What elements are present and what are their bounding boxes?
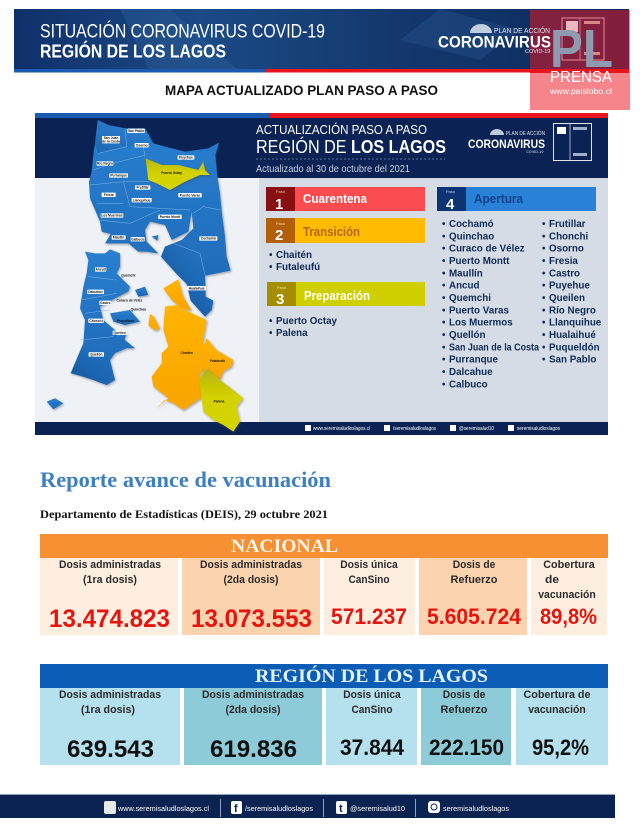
- nacional: cobertura: [531, 558, 607, 635]
- panel logo coronavirus: CORONAVIRUS: [468, 137, 545, 151]
- region: cansino: [326, 688, 417, 765]
- nacional: 1ra dosis: Dosis administradas: [59, 559, 161, 571]
- step 2: transicion: [266, 218, 425, 244]
- panel: region de los lagos: [40, 664, 608, 765]
- panel: nacional: NACIONAL: [231, 536, 338, 557]
- step 4 list, column 2: •: [542, 342, 546, 353]
- top banner: [14, 9, 629, 72]
- nacional: refuerzo: Refuerzo: [450, 574, 498, 586]
- map: commune labels: Frutillar: [136, 186, 150, 190]
- step 4 list, column 2: [542, 219, 602, 366]
- step 3: preparacion: [267, 282, 425, 308]
- region: refuerzo: 222.150: [429, 735, 504, 760]
- panel: nacional: [40, 534, 608, 635]
- step 4 list, column 1: Cochamó: [449, 219, 494, 230]
- nacional: cobertura: de: [545, 574, 559, 586]
- map: commune labels: Quellón: [90, 353, 103, 357]
- map: commune labels: Hualaihué: [189, 286, 205, 290]
- step 4 list, column 2: •: [542, 305, 546, 316]
- step 4 list, column 2: San Pablo: [549, 355, 596, 366]
- region: 1ra dosis: (1ra dosis): [81, 704, 135, 716]
- nacional: 1ra dosis: 13.474.823: [49, 605, 170, 633]
- region: cobertura: 95,2%: [532, 735, 589, 760]
- step 4 list, column 1: San Juan de la Costa: [449, 342, 540, 353]
- heading: mapa actualizado: MAPA ACTUALIZADO PLAN PASO A PASO: [165, 82, 438, 98]
- step 1: cuarentena: [266, 187, 425, 213]
- region: refuerzo: [421, 688, 511, 765]
- nacional: cansino: Dosis única: [340, 559, 399, 571]
- step 4 list, column 2: Frutillar: [549, 219, 586, 230]
- step 4 list, column 2: Chonchi: [549, 231, 588, 242]
- banner title: REGIÓN DE LOS LAGOS: [40, 40, 226, 62]
- step 1: cuarentena: Paso: [276, 189, 286, 194]
- map: commune borders: [80, 128, 220, 340]
- map: commune labels: Río Negro: [97, 162, 113, 166]
- panel footer links: /seremisaludloslagos: [393, 426, 436, 432]
- instagram link: seremisaludloslagos: [443, 806, 510, 813]
- step 3 list: [269, 316, 338, 339]
- banner logo: COVID-19: [525, 49, 550, 55]
- step 4 list, column 2: •: [542, 293, 546, 304]
- step 4 list, column 2: •: [542, 219, 546, 230]
- region: refuerzo: Refuerzo: [440, 704, 488, 716]
- step 4 list, column 2: Osorno: [549, 244, 584, 255]
- nacional: cobertura: Cobertura: [543, 559, 596, 571]
- map: commune labels: Maullín: [113, 236, 124, 240]
- watermark: PL Prensa: PRENSA: [550, 69, 612, 86]
- map: commune labels: Calbuco: [131, 237, 144, 241]
- nacional: 1ra dosis: [40, 558, 178, 635]
- map: commune labels: Dalcahue: [88, 290, 103, 294]
- panel title: [256, 122, 446, 175]
- step 2 list: Chaitén: [276, 250, 312, 261]
- map: commune labels: San Pablo: [128, 129, 144, 133]
- step 4 list, column 2: Llanquihue: [549, 318, 602, 329]
- map: commune labels: Quinchao: [131, 307, 146, 311]
- step 2 list: [269, 250, 320, 273]
- panel footer links: @seremisalud10: [459, 426, 494, 432]
- step 4 list, column 1: •: [442, 244, 446, 255]
- icon: instagram: [428, 801, 440, 813]
- map: commune labels: Los Muermos: [101, 214, 123, 218]
- banner title: SITUACIÓN CORONAVIRUS COVID-19: [40, 20, 325, 42]
- panel title: REGIÓN DE LOS LAGOS: [256, 136, 446, 157]
- map: commune labels: Palena: [214, 399, 224, 403]
- step 4 list, column 1: Quellón: [449, 330, 485, 341]
- step 2: transicion: Paso: [276, 221, 286, 226]
- step 1: cuarentena: 1: [275, 196, 283, 213]
- banner logo: CORONAVIRUS: [438, 32, 551, 52]
- step 4 list, column 1: Puerto Montt: [449, 256, 510, 267]
- region: 1ra dosis: Dosis administradas: [59, 689, 161, 701]
- map: commune labels: Puqueldón: [117, 319, 134, 323]
- region: 1ra dosis: [40, 688, 180, 765]
- map: commune labels: Futaleufú: [210, 359, 225, 363]
- map: commune labels: Puerto Octay: [161, 171, 182, 175]
- map: yellow communes (paso 3): [146, 158, 243, 432]
- step 4 list, column 1: Quinchao: [449, 231, 494, 242]
- heading: reporte avance de vacunacion: Reporte avance de vacunación: [40, 467, 331, 492]
- step 4 list, column 2: •: [542, 318, 546, 329]
- region: cobertura: [516, 688, 608, 765]
- step 2 list: •: [269, 262, 273, 273]
- map: commune labels: Curaco de Vélez: [116, 298, 143, 302]
- footer bar: [0, 794, 615, 818]
- region: cansino: 37.844: [340, 735, 405, 760]
- nacional: cansino: 571.237: [331, 604, 407, 629]
- nacional: 2da dosis: 13.073.553: [191, 605, 312, 633]
- subheading: departamento de estadisticas: Departamento de Estadísticas (DEIS), 29 octubre 2021: [40, 507, 328, 521]
- step 4 list, column 1: •: [442, 379, 446, 390]
- step 4 list, column 1: •: [442, 355, 446, 366]
- step 4 list, column 1: •: [442, 305, 446, 316]
- panel logo coronavirus: [468, 129, 545, 154]
- region: 1ra dosis: 639.543: [67, 736, 154, 763]
- step 4 list, column 2: Puqueldón: [549, 342, 600, 353]
- map: commune labels: Puerto Varas: [180, 193, 200, 197]
- website link: www.seremisaludloslagos.cl: [117, 806, 209, 813]
- map: commune labels: Chaitén: [181, 351, 193, 355]
- region: refuerzo: Dosis de: [443, 689, 485, 701]
- nacional: 2da dosis: [182, 558, 320, 635]
- panel logo coronavirus: COVID-19: [526, 150, 544, 154]
- step 4 list, column 1: Los Muermos: [449, 318, 513, 329]
- watermark: PL Prensa: www.paislobo.cl: [549, 87, 612, 96]
- nacional: cansino: CanSino: [348, 574, 390, 586]
- step 4 list, column 2: •: [542, 330, 546, 341]
- region: 2da dosis: 619.836: [210, 736, 297, 763]
- map: commune labels: Ancud: [95, 268, 106, 272]
- step 4 list, column 1: •: [442, 219, 446, 230]
- panel footer links: seremisaludloslagos: [517, 426, 560, 432]
- map: commune labels: Llanquihue: [133, 198, 151, 202]
- banner title: [40, 20, 325, 62]
- region: cobertura: Cobertura de: [524, 689, 590, 701]
- nacional: cobertura: vacunación: [538, 589, 596, 601]
- map: commune labels: Castro: [100, 301, 111, 305]
- step 4 list, column 1: [442, 219, 540, 390]
- map: commune labels: Puyehue: [179, 156, 193, 160]
- region: cansino: CanSino: [352, 704, 393, 716]
- facebook link: /seremisaludloslagos: [245, 806, 314, 813]
- panel title: ACTUALIZACIÓN PASO A PASO: [256, 122, 427, 137]
- watermark: PL Prensa: PL: [550, 19, 613, 79]
- step 4 list, column 1: Maullín: [449, 268, 483, 279]
- nacional: 2da dosis: Dosis administradas: [200, 559, 302, 571]
- panel logo coronavirus: PLAN DE ACCIÓN: [506, 130, 545, 137]
- region: 2da dosis: [184, 688, 322, 765]
- map: commune labels: Puerto Montt: [160, 215, 181, 219]
- icon: website: [104, 801, 116, 814]
- step 2 list: Futaleufú: [276, 262, 320, 273]
- step 4 list, column 2: Puyehue: [549, 281, 590, 292]
- map: commune labels: [87, 129, 225, 403]
- panel: region de los lagos: REGIÓN DE LOS LAGOS: [255, 665, 488, 687]
- map: commune labels: San Juan: [104, 136, 118, 140]
- icon: twitter: t: [339, 803, 343, 815]
- step 2: transicion: 2: [275, 227, 283, 244]
- step 4: apertura: Apertura: [474, 192, 524, 206]
- panel title: Actualizado al 30 de octubre del 2021: [256, 163, 410, 175]
- icon: facebook: f: [234, 803, 238, 815]
- nacional: 2da dosis: (2da dosis): [224, 574, 279, 586]
- icon: facebook: [231, 801, 242, 815]
- nacional: cansino: [324, 558, 415, 635]
- step 4: apertura: 4: [446, 196, 455, 213]
- step 3 list: Puerto Octay: [276, 316, 338, 327]
- nacional: 1ra dosis: (1ra dosis): [83, 574, 137, 586]
- nacional: refuerzo: Dosis de: [453, 559, 495, 571]
- step 4 list, column 2: •: [542, 244, 546, 255]
- twitter link: @seremisalud10: [350, 806, 405, 813]
- map: commune labels: Queilen: [114, 331, 126, 335]
- step 4 list, column 2: Río Negro: [549, 305, 596, 316]
- step 4 list, column 1: •: [442, 256, 446, 267]
- panel footer links: [305, 425, 560, 432]
- region: 2da dosis: (2da dosis): [226, 704, 281, 716]
- nacional: refuerzo: [419, 558, 527, 635]
- step 4 list, column 1: •: [442, 318, 446, 329]
- step 4 list, column 1: Puerto Varas: [449, 305, 509, 316]
- step 3 list: •: [269, 316, 273, 327]
- map of the region: [47, 120, 243, 432]
- step 4 list, column 1: Quemchi: [449, 293, 491, 304]
- step 4 list, column 1: Calbuco: [449, 379, 488, 390]
- step 4: apertura: Paso: [446, 189, 456, 194]
- step 4 list, column 1: Ancud: [449, 281, 479, 292]
- step 3: preparacion: Paso: [277, 285, 287, 290]
- step 4 list, column 1: •: [442, 367, 446, 378]
- region: 2da dosis: Dosis administradas: [202, 689, 304, 701]
- step 2 list: •: [269, 250, 273, 261]
- step 4 list, column 1: Dalcahue: [449, 367, 493, 378]
- step 4 list, column 2: Fresia: [549, 256, 578, 267]
- step 4 list, column 2: •: [542, 256, 546, 267]
- map: commune labels: Purranque: [110, 174, 127, 178]
- step 4 list, column 1: •: [442, 293, 446, 304]
- map: commune labels: Quemchi: [121, 273, 136, 277]
- icon: twitter: [336, 801, 347, 815]
- step 4 list, column 2: •: [542, 281, 546, 292]
- region: cansino: Dosis única: [343, 689, 402, 701]
- step 4: apertura: [437, 187, 596, 213]
- step 4 list, column 2: •: [542, 268, 546, 279]
- step 4 list, column 1: Purranque: [449, 355, 499, 366]
- banner logo: PLAN DE ACCIÓN: [494, 26, 550, 35]
- map: commune labels: Chonchi: [89, 319, 103, 323]
- nacional: cobertura: 89,8%: [540, 604, 597, 629]
- map: orange communes (paso 2): [148, 279, 233, 410]
- map: blue communes (paso 4): [47, 120, 231, 409]
- step 4 list, column 2: Queilen: [549, 293, 585, 304]
- panel: plan paso a paso: [35, 113, 608, 435]
- map: commune labels: Osorno: [136, 143, 148, 147]
- step 1: cuarentena: Cuarentena: [303, 192, 368, 206]
- map: commune labels: de la Costa: [102, 139, 120, 143]
- nacional: refuerzo: 5.605.724: [427, 604, 522, 629]
- step 3: preparacion: 3: [276, 291, 284, 308]
- step 4 list, column 2: •: [542, 355, 546, 366]
- step 4 list, column 2: Hualaihué: [549, 330, 596, 341]
- map: commune labels: Fresia: [104, 193, 114, 197]
- step 4 list, column 1: Curaco de Vélez: [449, 244, 525, 255]
- map: shaded lower communes: [71, 120, 213, 385]
- banner logo: [438, 24, 551, 55]
- step 4 list, column 1: •: [442, 342, 446, 353]
- step 3 list: Palena: [276, 328, 308, 339]
- step 4 list, column 1: •: [442, 330, 446, 341]
- step 4 list, column 1: •: [442, 231, 446, 242]
- step 4 list, column 1: •: [442, 281, 446, 292]
- watermark background: [530, 10, 630, 110]
- step 2: transicion: Transición: [303, 225, 360, 239]
- step 4 list, column 1: •: [442, 268, 446, 279]
- step 3 list: •: [269, 328, 273, 339]
- map: commune labels: Cochamó: [201, 237, 216, 241]
- region: cobertura: vacunación: [528, 704, 586, 716]
- step 3: preparacion: Preparación: [304, 289, 370, 303]
- panel footer links: www.seremisaludloslagos.cl: [313, 426, 370, 432]
- step 4 list, column 2: Castro: [549, 268, 580, 279]
- step 4 list, column 2: •: [542, 231, 546, 242]
- icon: ministry logo: [554, 124, 592, 160]
